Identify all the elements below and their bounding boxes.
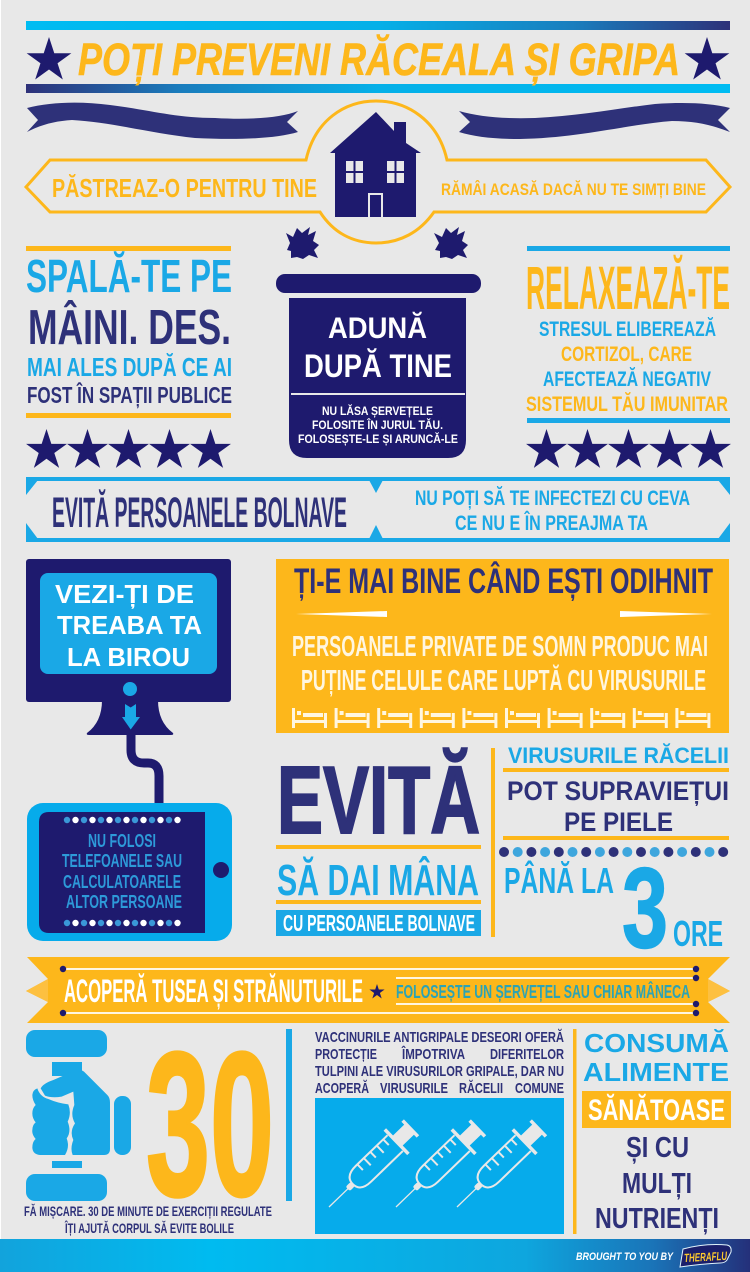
dot row	[499, 847, 728, 857]
panel: exercise	[24, 1010, 274, 1239]
heading: spală-te pe: SPALĂ-TE PE	[26, 250, 232, 302]
text: vaccine note: TULPINI ALE VIRUSURILOR GRIPALE, DAR NU	[315, 1063, 564, 1080]
text: exercise note: FĂ MIȘCARE. 30 DE MINUTE DE EXERCIȚII REGULATE	[24, 1203, 272, 1219]
panel: healthy food	[582, 1028, 731, 1235]
text: să dai mâna: SĂ DAI MÂNA	[277, 855, 479, 905]
text: și cu multi nutrienți: ȘI CU	[626, 1132, 689, 1164]
house banner	[26, 101, 730, 243]
icon: germ splat left	[286, 227, 319, 259]
monitor text: VEZI-ȚI DE	[55, 579, 194, 609]
heading: acoperă tusea: ACOPERĂ TUSEA ȘI STRĂNUTURILE	[64, 973, 363, 1009]
icon: syringe 3	[445, 1116, 550, 1219]
panel: phone	[27, 803, 232, 941]
cable	[131, 730, 159, 804]
title band	[26, 21, 730, 93]
label: cu persoanele bolnave: CU PERSOANELE BOLNAVE	[283, 910, 475, 936]
panel: avoid handshakes	[276, 747, 481, 936]
title star right	[685, 37, 729, 80]
text: până la: PÂNĂ LA	[504, 859, 614, 901]
icon row: beds	[292, 708, 710, 728]
vaccine panel background	[315, 1098, 564, 1234]
phone button	[213, 862, 229, 878]
text: exercise note: ÎȚI AJUTĂ CORPUL SĂ EVITE BOLILE	[64, 1219, 234, 1236]
text: vaccine note: VIRUSURILE	[380, 1080, 448, 1097]
phone text: CALCULATOARELE	[63, 872, 181, 892]
text: vaccine note: PROTECȚIE	[315, 1046, 377, 1063]
text: vaccine note: VACCINURILE ANTIGRIPALE DESEORI OFERĂ	[315, 1029, 564, 1046]
text: vaccine note: ÎMPOTRIVA	[401, 1045, 465, 1063]
icon: house	[330, 112, 421, 218]
text: mai ales: MAI ALES DUPĂ CE AI	[27, 352, 232, 382]
text: pot supraviețui: POT SUPRAVIEȚUI	[507, 776, 729, 806]
heading: mâini des: MÂINI. DES.	[28, 300, 231, 355]
star row right	[526, 429, 731, 468]
banner outline	[26, 101, 730, 243]
icon: arrow down	[122, 704, 140, 730]
icon: syringe 1	[317, 1116, 422, 1219]
text: spații publice: FOST ÎN SPAȚII PUBLICE	[27, 381, 232, 408]
footer	[0, 1239, 750, 1272]
text: vaccine note: ACOPERĂ	[315, 1080, 369, 1097]
logo: theraflu	[680, 1244, 731, 1267]
heading: adună: ADUNĂ	[328, 311, 427, 345]
icon: germ splat right	[434, 227, 468, 259]
text: sleep note	[292, 631, 708, 697]
phone text	[62, 831, 182, 912]
footer credit: BROUGHT TO YOU BY	[576, 1251, 674, 1263]
ribbon shape	[26, 957, 730, 1023]
phone body	[27, 803, 232, 941]
heading: virusurile răcelii: VIRUSURILE RĂCELII	[508, 743, 729, 768]
text: vaccine note: DIFERITELOR	[490, 1046, 564, 1063]
phone text: NU FOLOSI	[88, 831, 156, 851]
text: și cu multi nutrienți: NUTRIENȚI	[595, 1203, 719, 1235]
panel: avoid sick people banner	[26, 477, 730, 542]
dots bottom	[64, 920, 181, 926]
heading: alimente: ALIMENTE	[583, 1057, 729, 1087]
text: bin note: NU LĂSA ȘERVEȚELE	[322, 403, 433, 418]
text: infection note: CE NU E ÎN PREAJMA TA	[455, 511, 648, 535]
star row left	[26, 429, 231, 468]
label: cu persoanele bolnave	[276, 910, 481, 936]
panel: vaccines	[315, 1029, 564, 1234]
text: exercise note	[24, 1203, 272, 1236]
banner text left: PĂSTREAZ-O PENTRU TINE	[52, 173, 317, 203]
monitor text: LA BIROU	[67, 642, 190, 672]
panel: virus survival	[499, 743, 729, 972]
bin body	[289, 298, 466, 458]
title star left	[27, 37, 71, 80]
text: vaccine note: COMUNE	[515, 1080, 564, 1097]
text: pe piele: PE PIELE	[564, 807, 673, 837]
text: bin note: FOLOSITE ÎN JURUL TĂU.	[312, 417, 443, 432]
heading: evită: EVITĂ	[277, 747, 480, 854]
ribbon left	[27, 103, 298, 139]
text: stress	[526, 318, 728, 416]
panel: wash hands	[26, 246, 232, 468]
text: infection note	[415, 487, 690, 535]
text: și cu multi nutrienți: MULȚI	[622, 1168, 692, 1200]
icon: dumbbell in hand	[26, 1030, 131, 1201]
monitor screen	[40, 573, 217, 674]
monitor body	[26, 559, 231, 702]
heading: consumă: CONSUMĂ	[584, 1028, 729, 1058]
monitor text: TREABA TA	[57, 610, 202, 640]
icon: star	[369, 984, 385, 998]
panel: avoid sick people banner: EVITĂ PERSOANELE BOLNAVE	[52, 489, 347, 537]
number: 3: 3	[622, 845, 668, 972]
monitor stand	[87, 700, 173, 735]
panel: bin	[276, 274, 481, 458]
text: ore: ORE	[673, 913, 723, 954]
monitor button	[123, 682, 137, 696]
text: stress: CORTIZOL, CARE	[561, 343, 692, 366]
text: bin note	[298, 403, 458, 446]
ribbon right	[459, 103, 730, 139]
number: 30: 30	[146, 1010, 274, 1239]
panel: monitor	[26, 559, 231, 804]
phone screen	[39, 812, 205, 933]
phone text: ALTOR PERSOANE	[66, 892, 182, 912]
heading: după tine: DUPĂ TINE	[304, 348, 452, 384]
phone text: TELEFOANELE SAU	[62, 851, 182, 871]
bin lid	[276, 274, 481, 293]
dots top	[64, 817, 181, 823]
banner: cover coughs	[26, 957, 730, 1023]
text: bin note: FOLOSEȘTE-LE ȘI ARUNCĂ-LE	[298, 431, 458, 446]
logo: theraflu: THERAFLU	[684, 1249, 728, 1265]
text: vaccine note	[315, 1029, 564, 1097]
text: și cu multi nutrienți	[595, 1132, 719, 1235]
icon: syringe 2	[384, 1116, 489, 1219]
text: vaccine note: RĂCELII	[459, 1080, 503, 1097]
monitor text	[55, 579, 202, 672]
panel: relax	[526, 246, 731, 468]
panel: rest	[276, 559, 729, 733]
